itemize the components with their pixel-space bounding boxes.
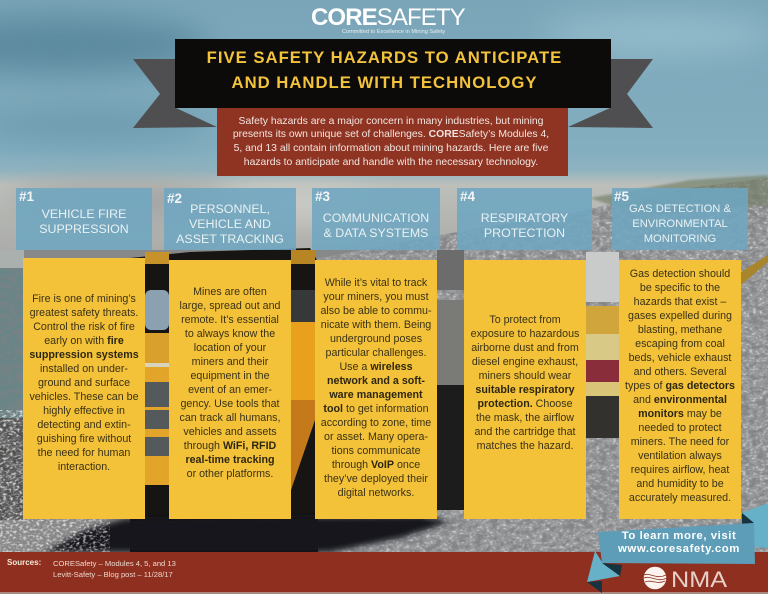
card #2 text [169,260,291,519]
ribbon: title banner tails [133,59,653,128]
card #1 text: highly effective in [43,405,125,417]
sources label: Sources: [7,558,41,567]
intro text block: presents its own unique set of challenges. CORESafety’s Modules 4, [233,129,549,140]
title [175,39,611,108]
card #5 text [619,260,741,519]
card #4 text: protection. Choose [477,398,573,410]
card #2 text: gency. Use tools that [180,398,280,410]
sources list: Levitt-Safety – Blog post – 11/28/17 [53,570,173,579]
heading #2: personnel, vehicle and asset tracking: ASSET TRACKING [176,232,284,246]
card #1 text: guishing fire without [37,433,131,445]
logo: CORESafety: Committed to Excellence in Mining Safety [342,28,445,34]
heading #5: gas detection and environmental monitoring: #5 [614,189,629,204]
card #1 text: interaction. [58,461,110,473]
card #5 text: and humidity to be [636,478,724,490]
ribbon: call to action shape [587,503,768,593]
card #1 text: ground and surface [38,377,130,389]
heading #4: respiratory protection: RESPIRATORY [481,211,568,225]
sources list [53,559,176,579]
title: FIVE SAFETY HAZARDS TO ANTICIPATE [207,48,562,66]
card #3 text: or asset. Many opera- [324,430,428,442]
card #3 text: digital networks. [338,486,414,498]
card #3 text: Use a wireless [339,360,413,372]
card #1 text: installed on under- [40,363,128,375]
card #2 text: equipment in the [190,370,270,382]
logo: CORESafety: CORESAFETY [311,4,465,31]
card #3 text: particular challenges. [326,346,426,358]
left hillside [0,250,24,520]
heading #5: gas detection and environmental monitoring: MONITORING [644,233,716,245]
heading #2: personnel, vehicle and asset tracking: VEHICLE AND [189,217,271,231]
card #1 text: detecting and extin- [37,419,131,431]
card #3 text: tions communicate [331,444,421,456]
card #5 text: accurately measured. [629,492,731,504]
card #3 text: nicate with them. Being [321,318,431,330]
heading #3: communication and data systems [312,188,440,250]
heading #1: vehicle fire suppression [16,188,152,250]
card #5 text: be specific to the [640,282,720,294]
card #2 text: to always know the [185,328,275,340]
heading #3: communication and data systems: #3 [315,189,330,204]
second truck bed [437,250,464,290]
card #4 text [464,260,586,519]
card #3 text: according to zone, time [321,416,431,428]
card #1 text: vehicles. These can be [29,391,139,403]
card #5 text: ventilation always [638,450,722,462]
heading #1: vehicle fire suppression: #1 [19,189,34,204]
card #5 text: gases expelled during [628,310,732,322]
card #1 text: suppression systems [29,349,139,361]
card #2 text: can track all humans, [180,412,280,424]
card #4 text: suitable respiratory [475,384,575,396]
card #4 text: miners should wear [479,370,571,382]
intro text block: 5, and 13 all contain information about mining hazards. Here are five [234,143,548,154]
intro text block: Safety hazards are a major concern in many industries, but mining [239,116,543,126]
card #5 text: and environmental [633,394,727,406]
heading #2: personnel, vehicle and asset tracking: #2 [167,191,182,206]
card #1 text [23,258,145,519]
intro text block: hazards to anticipate and handle with the necessary technology. [244,157,538,168]
rock slope on the right [300,178,768,552]
card #5 text: requires airflow, heat [631,464,729,476]
card #5 text: and others. Several [634,366,726,378]
card #5 text: miners. The need for [631,436,729,448]
card #3 text: also be able to commu- [320,304,432,316]
ground shadow [45,516,450,552]
call to action text: To learn more, visit [622,530,736,542]
heading #2: personnel, vehicle and asset tracking: PERSONNEL, [190,202,270,216]
card #2 text: location of your [194,342,266,354]
heading #5: gas detection and environmental monitoring: ENVIRONMENTAL [632,218,728,230]
heading #1: vehicle fire suppression: SUPPRESSION [39,222,129,236]
card #5 text: types of gas detectors [625,380,735,392]
heading #3: communication and data systems: & DATA SYSTEMS [324,226,428,240]
card #3 text: they’ve deployed their [324,472,428,484]
icon: NMA logo [644,566,727,591]
card #1 text: Control the risk of fire [33,321,135,333]
card #2 text: miners and their [192,356,268,368]
card #5 text: Gas detection should [630,268,730,280]
card #1 text: greatest safety threats. [30,307,138,319]
card #5 text: blasting, methane [638,324,722,336]
card #4 text: the mask, the airflow [476,412,574,424]
heading #2: personnel, vehicle and asset tracking [164,188,296,250]
heading #5: gas detection and environmental monitoring: GAS DETECTION & [629,203,731,215]
card #5 text: needed to protect [638,422,722,434]
card #1 text: the need for human [38,447,130,459]
card #3 text: ware management [329,388,423,400]
intro text block [217,108,568,176]
card #3 text [315,260,437,519]
dump truck [130,248,768,552]
card #4 text: To protect from [489,314,561,326]
heading #4: respiratory protection [457,188,592,250]
call to action text: www.coresafety.com [618,543,740,555]
card #2 text: or other platforms. [187,468,273,480]
sources list: CORESafety – Modules 4, 5, and 13 [53,559,176,568]
card #5 text: escaping from coal [635,338,725,350]
card #3 text: While it’s vital to track [325,276,427,288]
card #3 text: underground poses [330,332,422,344]
heading #4: respiratory protection: PROTECTION [484,226,565,240]
card #5 text: beds, vehicle exhaust [629,352,731,364]
card #5 text: hazards that exist – [634,296,726,308]
card #3 text: tool to get information [323,402,429,414]
heading #4: respiratory protection: #4 [460,189,475,204]
heading #5: gas detection and environmental monitoring [612,188,748,250]
card #1 text: early on with fire [44,335,124,347]
title: AND HANDLE WITH TECHNOLOGY [232,73,537,92]
footer band [0,552,768,592]
card #3 text: your miners, you must [323,290,429,302]
card #2 text: event of an emer- [188,384,272,396]
card #2 text: remote. It’s essential [181,314,279,326]
card #2 text: vehicles and assets [183,426,277,438]
green hill patch [590,175,768,215]
card #4 text: exposure to hazardous [471,328,579,340]
card #2 text: real-time tracking [185,454,275,466]
card #4 text: airborne dust and from [471,342,579,354]
card #4 text: matches the hazard. [477,440,573,452]
heading #1: vehicle fire suppression: VEHICLE FIRE [42,207,126,221]
heading #3: communication and data systems: COMMUNICATION [323,211,429,225]
card #1 text: Fire is one of mining’s [32,293,136,305]
card #5 text: monitors may be [638,408,722,420]
card #3 text: through VoIP once [332,458,420,470]
card #3 text: network and a soft- [327,374,425,386]
card #2 text: large, spread out and [179,300,280,312]
card #4 text: diesel engine exhaust, [472,356,578,368]
card #2 text: Mines are often [193,286,267,298]
call to action text [618,530,740,555]
card #4 text: and the cartridge that [474,426,576,438]
card #2 text: through WiFi, RFID [184,440,276,452]
